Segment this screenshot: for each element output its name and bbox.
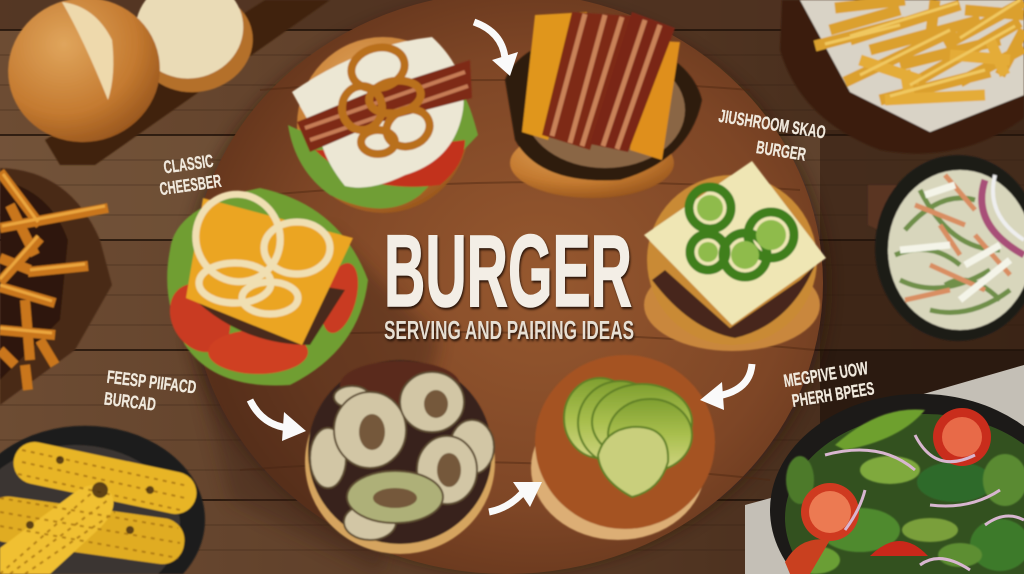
label: veggie sides <box>782 358 876 412</box>
title: main heading: BURGER <box>384 214 632 328</box>
side: grilled corn plate <box>0 426 205 574</box>
burger: bacon and cheddar (top center) <box>505 12 702 198</box>
side: burger buns on wooden board <box>0 0 330 165</box>
label: classic cheesburger <box>155 150 222 199</box>
arrow: to top center burger <box>474 22 518 76</box>
burger: bacon, white cheese and onion rings (top left) <box>288 37 478 213</box>
label: mushroom burger: JIUSHROOM SKAO <box>717 106 827 142</box>
label: fresh burcad <box>103 367 197 419</box>
arrow: from salad to avocado burger <box>700 364 752 410</box>
burger: mushrooms (bottom left) <box>305 360 495 554</box>
side: green salad bowl <box>745 365 1024 574</box>
label: mushroom burger: BURGER <box>755 137 807 165</box>
burger: avocado on veggie patty (bottom right) <box>531 355 715 540</box>
label: classic cheesburger: CHEESBER <box>158 171 222 199</box>
label: veggie sides: MEGPIVE UOW <box>782 358 869 391</box>
label: fresh burcad: FEESP PIIFACD <box>106 367 197 398</box>
title <box>384 214 634 345</box>
burger: classic cheeseburger with onion rings (left) <box>158 182 368 386</box>
side: french fries basket <box>780 0 1024 154</box>
title: subtitle: SERVING AND PAIRING IDEAS <box>384 315 634 345</box>
burger: jalapeno and white cheese (right) <box>644 161 826 351</box>
label: veggie sides: PHERH BPEES <box>790 378 876 411</box>
side: sweet potato fries <box>0 168 112 405</box>
arrow: to mushroom burger <box>250 400 306 441</box>
circular wooden serving board <box>187 0 827 574</box>
label: classic cheesburger: CLASSIC <box>162 151 215 177</box>
arrow: to avocado burger <box>489 482 542 512</box>
side: coleslaw bowl <box>868 155 1024 341</box>
label: mushroom burger <box>713 106 827 167</box>
label: fresh burcad: BURCAD <box>103 389 157 415</box>
